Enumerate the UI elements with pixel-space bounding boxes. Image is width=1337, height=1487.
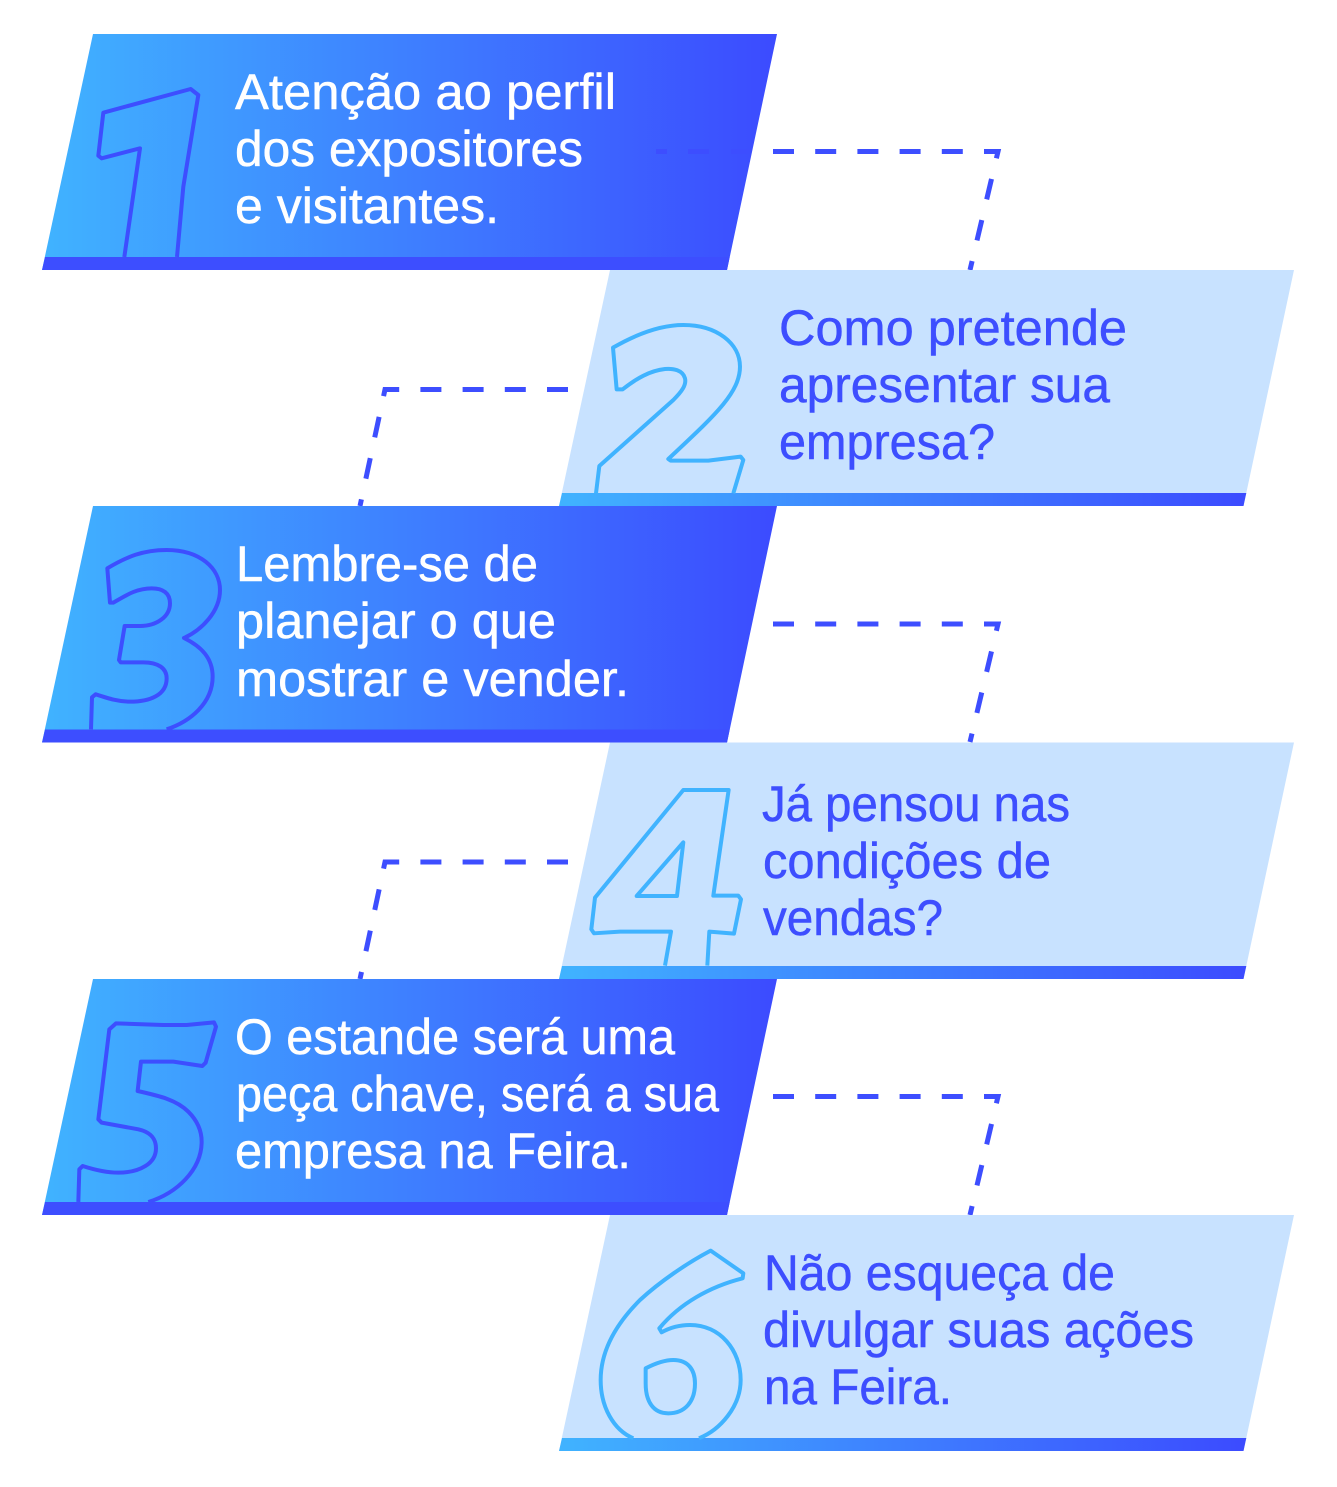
text: step 5: O estande será uma — [235, 1009, 675, 1065]
text: step 3: Lembre-se de — [236, 536, 538, 592]
text: step 6: Não esqueça de — [764, 1245, 1115, 1301]
number 3 outline — [91, 550, 220, 729]
text: step 5: empresa na Feira. — [235, 1123, 631, 1179]
text: step 4: condições de — [763, 833, 1051, 889]
text: step 4: Já pensou nas — [762, 776, 1070, 832]
panel: step 4 — [559, 742, 1294, 979]
text: step 2 — [779, 300, 1127, 470]
connector: step 4 to step 5 — [360, 862, 568, 979]
text: step 5: peça chave, será a sua — [236, 1066, 719, 1122]
text: step 3: planejar o que — [236, 593, 556, 649]
connector: step 2 to step 3 — [360, 390, 568, 506]
number 2 outline — [596, 325, 743, 493]
panel: step 1 — [42, 34, 777, 270]
panel: step 3 — [42, 506, 777, 742]
number 6 outline — [601, 1251, 743, 1438]
number 4 outline — [591, 790, 741, 966]
text: step 1 — [235, 64, 616, 234]
connector: step 3 to step 4 — [773, 624, 998, 742]
text: step 3: mostrar e vender. — [236, 651, 629, 707]
panel: step 2 — [559, 270, 1294, 506]
text: step 1: e visitantes. — [235, 178, 499, 234]
text: step 6 — [763, 1245, 1194, 1415]
text: step 2: apresentar sua — [779, 357, 1110, 413]
connector: step 5 to step 6 — [773, 1096, 998, 1215]
text: step 1: dos expositores — [235, 121, 583, 177]
text: step 5 — [235, 1009, 719, 1179]
text: step 6: na Feira. — [764, 1359, 952, 1415]
text: step 3 — [236, 536, 629, 707]
text: step 4 — [762, 776, 1070, 946]
panel: step 6 — [559, 1215, 1294, 1451]
number 5 outline — [78, 1022, 216, 1202]
text: step 1: Atenção ao perfil — [235, 64, 616, 120]
text: step 2: Como pretende — [779, 300, 1127, 356]
connector: step 1 to step 2 — [773, 152, 998, 270]
text: step 6: divulgar suas ações — [763, 1302, 1194, 1358]
panel: step 5 — [42, 979, 777, 1215]
text: step 4: vendas? — [763, 890, 943, 946]
text: step 2: empresa? — [779, 414, 995, 470]
number 1 outline — [98, 89, 198, 257]
